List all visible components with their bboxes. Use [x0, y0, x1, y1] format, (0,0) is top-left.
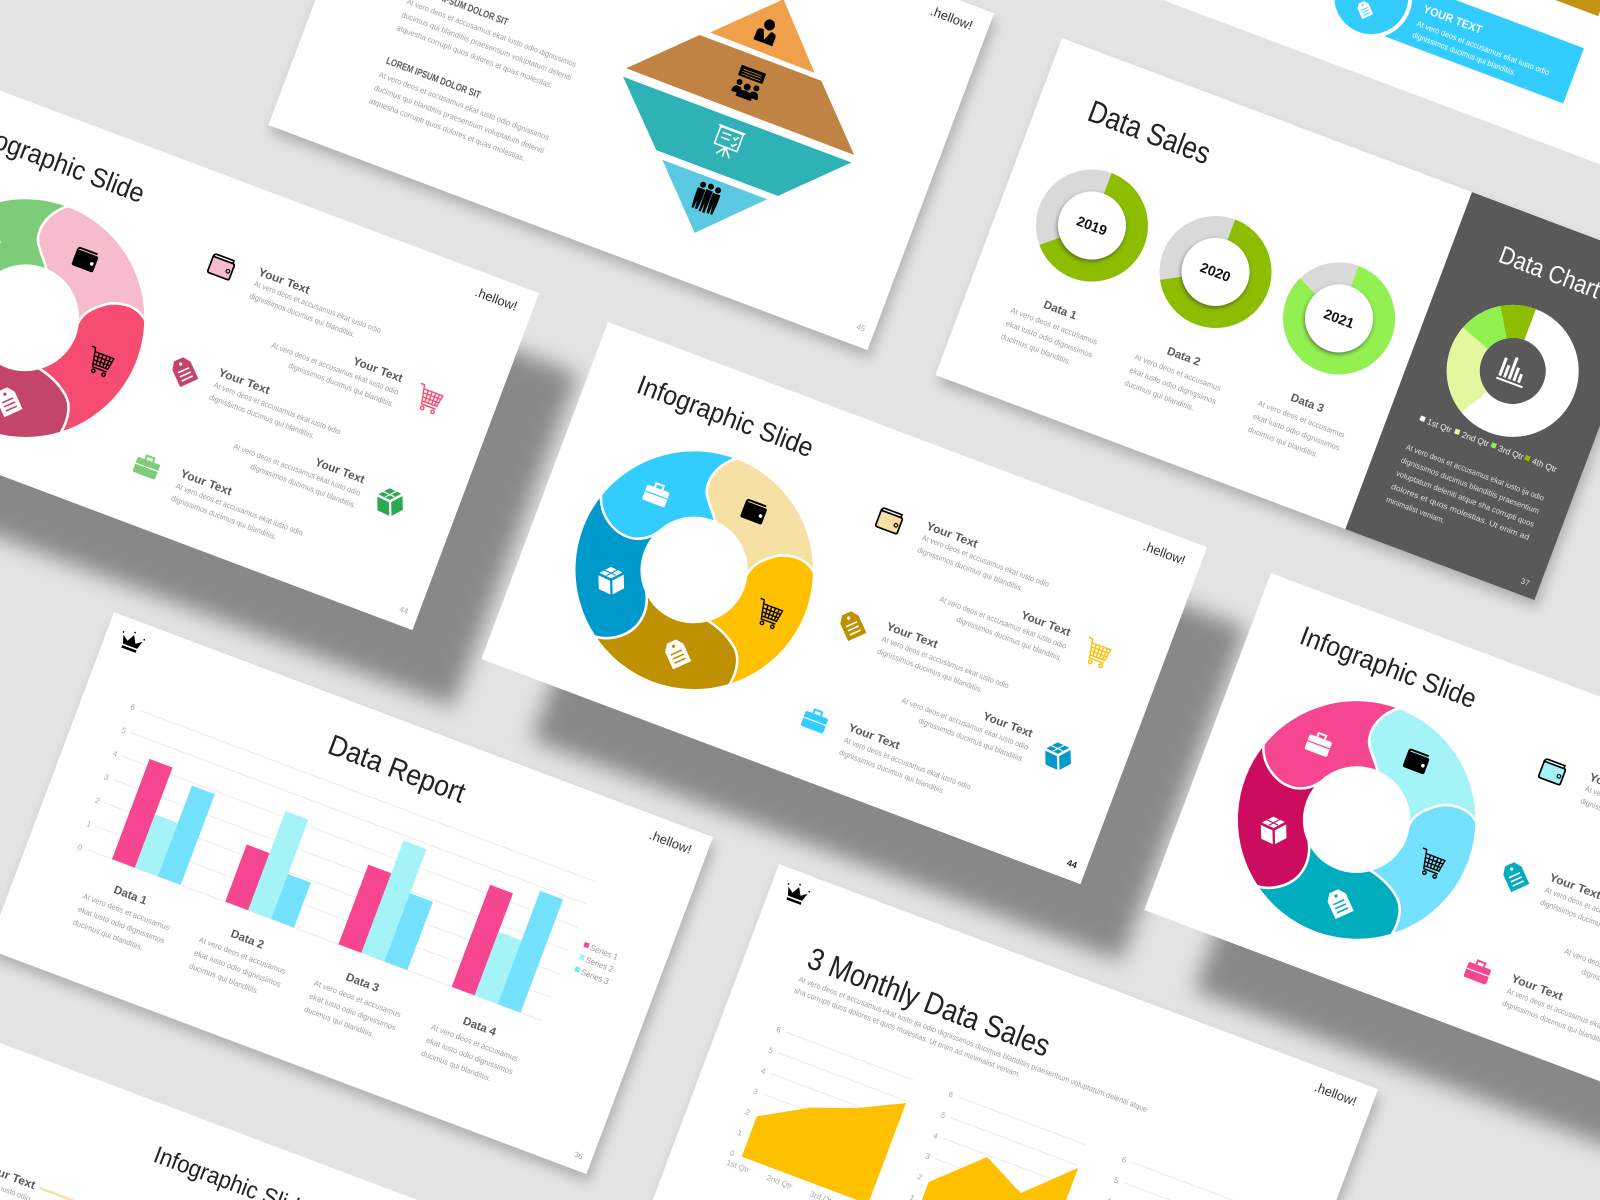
label: data 1 — [72, 875, 177, 959]
icon: presentation board — [709, 125, 746, 162]
item 4: At vero deos et accusamus ekat iusto odio — [232, 442, 362, 498]
item 1: At vero deos et accusamus ekat iusto odio — [253, 279, 383, 335]
label: data 2: At vero deos et accusamus — [1133, 352, 1222, 393]
item 5 — [127, 452, 310, 550]
text block 2 — [368, 55, 556, 168]
title: Data Report — [324, 729, 470, 810]
logo: .hellow! — [473, 284, 520, 314]
panel: data sales slide — [933, 38, 1600, 608]
area chart 1: 3 — [752, 1087, 760, 1097]
item 2 — [934, 581, 1113, 678]
blue banner — [1370, 0, 1584, 103]
segmented donut — [0, 198, 146, 438]
text block 2: atquesha corrupti quos dolores et quas molestias. — [368, 96, 526, 163]
doughnut 2019 — [1034, 168, 1150, 283]
label: data 4: ekat iusto odio dignissimos — [425, 1036, 514, 1076]
chart legend: Series 3 — [580, 967, 611, 986]
label: data 3: ekat iusto odio dignissimos — [1252, 412, 1341, 453]
label: data 1: ekat iusto odio dignissimos — [77, 905, 166, 945]
item 3: At vero deos et accusamus ekat iusto odio — [881, 634, 1011, 691]
page number: 37 — [1519, 576, 1531, 588]
item 1: At vero deos et accusamus ekat iusto odio — [921, 533, 1051, 589]
bar chart: 3 — [103, 772, 111, 783]
sidebar legend — [1418, 414, 1559, 474]
page number: 36 — [573, 1150, 585, 1162]
area chart 2: 5 — [939, 1110, 947, 1120]
label: data 2: ekat iusto odio dignissimos — [193, 948, 282, 989]
title: Infographic Slide — [1296, 621, 1481, 714]
banner heading: YOUR TEXT — [1421, 4, 1484, 37]
item 1 — [871, 504, 1055, 601]
bar chart: 0 — [76, 843, 84, 853]
item 5: Your Text — [847, 722, 901, 752]
bars: data 1 — [112, 759, 218, 885]
area chart 1: 2 — [744, 1107, 752, 1118]
donut icons — [0, 206, 147, 446]
label: data 1: At vero deos et accusamus — [82, 892, 171, 932]
item 1 — [203, 250, 387, 347]
item 3: Your Text — [1548, 872, 1600, 902]
donut icons — [1236, 707, 1478, 948]
logo: .hellow! — [928, 3, 975, 33]
bars: data 3 — [338, 832, 449, 970]
area chart 3: 6 — [1120, 1155, 1128, 1165]
label: data 1: At vero deos et accusamus — [1009, 306, 1099, 347]
page number: 45 — [855, 322, 867, 334]
area chart 2 — [901, 1090, 1088, 1200]
label: data 3: Data 3 — [344, 971, 381, 995]
item 3 — [1493, 855, 1600, 954]
area chart 2: 4 — [932, 1131, 940, 1141]
label: data 3: ducimus qui blanditiis. — [303, 1005, 375, 1039]
area chart 1: 1st Qtr — [725, 1158, 751, 1175]
text block 2: LOREM IPSUM DOLOR SIT — [384, 56, 482, 101]
text block 1: ducimus qui blanditiis praesentium voluptatum deleniti — [400, 10, 573, 82]
area chart 3: 5 — [1113, 1175, 1120, 1186]
logo: .hellow! — [1141, 538, 1188, 568]
sidebar paragraph: dignissimos ducimus blanditiis praesentium — [1400, 456, 1541, 516]
blue circle badge — [1319, 0, 1424, 50]
item 4: Your Text — [313, 457, 366, 486]
doughnut 2020: 2020 — [1198, 259, 1233, 285]
sidebar legend: 3rd Qtr — [1497, 443, 1525, 462]
item 4 — [228, 427, 412, 527]
item 1: dignissimos ducimus qui blanditiis. — [248, 291, 356, 339]
item 5 — [1458, 957, 1600, 1055]
icon: three people — [690, 180, 723, 216]
sidebar paragraph — [1385, 443, 1546, 555]
item 4: dignissimos ducimus qui blanditiis. — [917, 716, 1025, 764]
banner text: At vero deos et accusamus ekat iusto odio — [1415, 19, 1551, 77]
sidebar legend: 1st Qtr — [1426, 416, 1453, 435]
item 4 — [896, 681, 1080, 781]
panel: data chart sidebar — [1345, 192, 1600, 600]
label: data 2: ekat iusto odio dignissimos — [1128, 365, 1217, 406]
item 3: dignissimos ducimus qui blanditiis. — [208, 393, 316, 440]
item 5: At vero deos et accusamus ekat iusto odio — [175, 482, 305, 538]
text block 2: ducimus qui blanditiis praesentium voluptatum deleniti — [373, 83, 546, 155]
label: data 3: ducimus qui blanditiis. — [1247, 425, 1319, 459]
label: data 3 — [303, 962, 408, 1045]
sidebar doughnut chart — [1449, 307, 1576, 435]
icon: person — [754, 16, 781, 46]
pyramid tier: teal — [603, 77, 851, 216]
item 3: Your Text — [217, 367, 271, 397]
label: data 3: Data 3 — [1289, 392, 1325, 415]
item 2: dignissimos ducimus qui blanditiis. — [955, 615, 1063, 663]
item 2 — [266, 327, 445, 424]
segmented donut — [574, 450, 814, 690]
area chart 1: 5 — [767, 1046, 775, 1056]
label: data 4 — [420, 1006, 525, 1089]
area chart 2: 2 — [916, 1172, 924, 1182]
label: data 1 — [1000, 289, 1105, 373]
sidebar paragraph: dolores et quos molestias. Ut enim ad — [1390, 482, 1531, 542]
label: data 2: Data 2 — [229, 928, 265, 952]
item 2: At vero deos et accusamus ekat iusto odio — [270, 341, 400, 397]
sidebar paragraph: voluptatum deleniti atque sha corrupti quos — [1395, 469, 1536, 529]
doughnut 2021 — [1281, 260, 1397, 376]
label: data 3: At vero deos et accusamus — [313, 978, 402, 1019]
area chart 3 — [1099, 1155, 1260, 1200]
text block 2: At vero deos et accusamus ekat iusto odio dignissimos — [378, 70, 550, 142]
donut icons — [574, 458, 815, 698]
label: data 3: ekat iusto odio dignissimos — [308, 992, 397, 1032]
item 3 — [162, 350, 348, 449]
page number: 44 — [398, 605, 410, 616]
item 4: At vero deos et accusamus ekat iusto odio — [900, 696, 1030, 752]
item 3 — [830, 604, 1016, 703]
area chart 1: 0 — [728, 1149, 736, 1159]
item 3: At vero deos et accusamus ekat iusto odio — [213, 380, 343, 437]
sidebar paragraph: minimalist veniam. — [1385, 495, 1446, 525]
item 5: dignissimos ducimus qui blanditiis. — [170, 494, 278, 542]
label: data 1: ekat iusto odio dignissimos — [1005, 319, 1094, 360]
gold banner fragment — [1403, 0, 1600, 16]
panel: top right slide (partial) — [1163, 0, 1600, 225]
panel: pink infographic slide — [0, 68, 539, 630]
bar chart: 1 — [85, 819, 93, 829]
area chart 1: 1 — [736, 1128, 744, 1138]
label: data 2 — [1123, 335, 1229, 419]
panel: central infographic slide — [481, 322, 1207, 884]
sidebar paragraph: At vero deos et accusamus ekat iusto ija odio — [1405, 443, 1546, 503]
item 2: Your Text — [1019, 610, 1072, 639]
item 2: At vero deos et accusamus ekat iusto odio — [938, 595, 1068, 651]
item 5: Your Text — [179, 468, 233, 498]
title: 3 Monthly Data Sales — [803, 941, 1055, 1064]
logo: .hellow! — [647, 827, 694, 857]
item 5: Your Text — [1510, 973, 1564, 1003]
bar chart: 5 — [120, 726, 128, 736]
label: data 1: Data 1 — [1042, 299, 1079, 323]
bar chart — [76, 702, 597, 1026]
chart legend: Series 1 — [589, 942, 620, 962]
area chart 1 — [725, 1025, 916, 1200]
item 1 — [1534, 755, 1600, 852]
area chart 2: 3 — [924, 1151, 932, 1162]
logo: .hellow! — [1312, 1079, 1359, 1109]
item 1: dignissimos ducimus qui blanditiis. — [916, 545, 1024, 593]
label: data 1: ducimus qui blanditiis. — [1000, 332, 1072, 366]
subtitle: At vero deos et accusamus ekat iusto ija odio dignissimos ducimus blanditiis praesentium voluptatum deleniti atque — [797, 975, 1149, 1114]
label: data 2: ducimus qui blanditiis. — [1123, 378, 1196, 413]
bars: data 2 — [225, 802, 331, 928]
panel: bottom left infographic slide (partial) — [0, 902, 562, 1200]
sidebar legend: 2nd Qtr — [1460, 429, 1491, 449]
panel: pink and teal infographic slide — [1144, 573, 1600, 1135]
item 2: Your Text — [351, 356, 404, 385]
text block 1: atquesha corrupti quos dolores et quas molestias. — [395, 23, 554, 90]
area chart 1: 6 — [775, 1025, 783, 1035]
doughnut 2021: 2021 — [1322, 305, 1357, 331]
bar chart: 4 — [111, 749, 119, 759]
crown logo — [782, 880, 812, 906]
item 5: dignissimos ducimus qui blanditiis. — [838, 748, 946, 796]
label: data 4: ducimus qui blanditiis. — [420, 1049, 492, 1083]
item 3: dignissimos ducimus qui blanditiis. — [876, 647, 984, 694]
pyramid tier: orange — [710, 0, 835, 73]
label: data 4: Data 4 — [461, 1015, 498, 1039]
item 3: Your Text — [885, 621, 939, 651]
item 4 — [1559, 933, 1600, 1015]
bar chart: 6 — [129, 702, 137, 712]
label: data 1: ducimus qui blanditiis. — [72, 918, 144, 952]
doughnut 2019: 2019 — [1075, 213, 1110, 239]
item 2: dignissimos ducimus qui blanditiis. — [287, 361, 395, 409]
page number: 44 — [1066, 857, 1078, 870]
item connector — [39, 1187, 96, 1200]
area chart 1: 2nd Qtr — [765, 1173, 794, 1191]
label: data 2: Data 2 — [1165, 345, 1202, 369]
label: data 3 — [1247, 382, 1352, 466]
label: data 3: At vero deos et accusamus — [1257, 399, 1346, 439]
segmented donut — [1237, 700, 1477, 940]
area chart 2: 6 — [947, 1090, 955, 1100]
panel: data report slide — [0, 612, 718, 1182]
item 4: dignissimos ducimus qui blanditiis. — [249, 462, 357, 510]
doughnut 2020 — [1158, 214, 1273, 330]
item 1: Your Text — [256, 267, 311, 297]
title: Infographic Slide — [633, 370, 818, 463]
pyramid tier: brown — [626, 15, 875, 155]
subtitle: sha corrupti quos dolores et quos molestias. Ut enim ad minimalist veniam. — [793, 986, 1022, 1079]
item 5: At vero deos et accusamus ekat iusto odio — [843, 736, 973, 792]
panel: 3 monthly data sales slide — [650, 864, 1383, 1200]
label: data 2 — [188, 918, 293, 1002]
pyramid tier: light blue — [642, 160, 767, 253]
sidebar legend: 4th Qtr — [1531, 456, 1559, 474]
item 1: Your Text — [924, 521, 979, 551]
item 4: Your Text — [981, 711, 1034, 740]
crown logo — [117, 628, 147, 654]
banner text: dignissimos ducimus qui blanditiis. — [1411, 30, 1517, 78]
label: data 2: ducimus qui blanditiis. — [188, 961, 260, 996]
bar chart: 2 — [94, 796, 102, 806]
bars: data 4 — [452, 874, 563, 1013]
area chart 1: 4 — [759, 1066, 767, 1076]
label: data 1: Data 1 — [112, 884, 149, 908]
item 5 — [795, 706, 978, 804]
label: data 2: At vero deos et accusamus — [198, 935, 287, 976]
label: data 4: At vero deos et accusamus — [430, 1022, 519, 1063]
chart legend: Series 2 — [584, 955, 615, 974]
icon: meeting — [730, 64, 767, 103]
title: Data Sales — [1083, 93, 1215, 171]
panel: pyramid slide — [266, 0, 999, 358]
chart legend — [573, 940, 620, 986]
